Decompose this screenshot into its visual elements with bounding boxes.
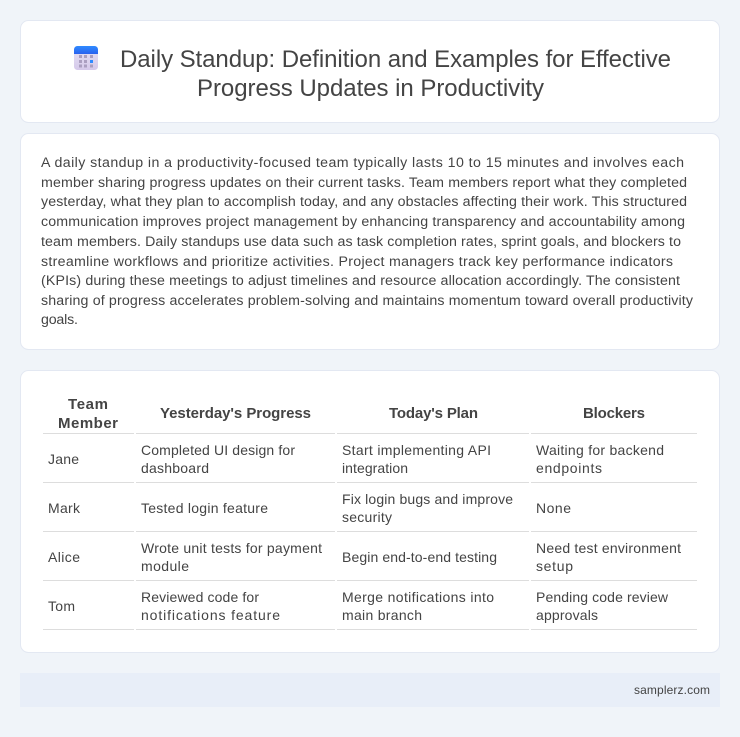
table row: Jane: Jane <box>48 451 79 467</box>
table row: Mark: Fix login bugs and improve <box>342 491 513 507</box>
title <box>120 46 671 102</box>
table header: Member <box>58 415 118 432</box>
description text: goals. <box>41 312 78 328</box>
table row: Jane: integration <box>342 460 408 476</box>
table row: Mark: Mark <box>48 500 81 516</box>
table row: Mark: None <box>536 500 571 516</box>
footer bar <box>20 673 720 707</box>
table row: Alice: Need test environment <box>536 540 681 556</box>
title: Daily Standup: Definition and Examples for Effective <box>120 46 671 73</box>
table row: Mark: security <box>342 509 392 525</box>
table row: Tom: approvals <box>536 607 598 623</box>
header panel <box>20 20 720 122</box>
table row: Alice: module <box>141 558 189 574</box>
table row: Alice: Wrote unit tests for payment <box>141 540 322 556</box>
panel: description <box>20 134 720 350</box>
description text: streamline workflows and prioritize activities. Project managers track key performance indicators <box>41 254 673 270</box>
title: Progress Updates in Productivity <box>197 75 544 102</box>
table header: Today's Plan <box>389 405 478 422</box>
table header <box>43 396 697 434</box>
table header: Team <box>68 396 108 413</box>
description text: A daily standup in a productivity-focused team typically lasts 10 to 15 minutes and involves each <box>41 155 684 171</box>
table row: Jane <box>43 442 697 483</box>
description text: (KPIs) during these meetings to adjust timelines and resource allocation accordingly. The consistent <box>41 273 680 289</box>
description text: yesterday, what they plan to accomplish today, and any obstacles affecting their work. This structured <box>41 194 687 210</box>
description text <box>41 155 694 328</box>
table row: Jane: Completed UI design for <box>141 442 295 458</box>
icon: calendar <box>74 46 98 70</box>
table row: Mark: Tested login feature <box>141 500 268 516</box>
table row: Jane: endpoints <box>536 460 602 476</box>
description text: sharing of progress accelerates problem-solving and maintains momentum toward overall productivity <box>41 293 694 309</box>
description text: team members. Daily standups use data such as task completion rates, sprint goals, and blockers to <box>41 234 681 250</box>
table row: Tom <box>43 589 697 630</box>
table header: Blockers <box>583 405 645 422</box>
panel: standup table <box>20 370 720 652</box>
table row: Alice: setup <box>536 558 573 574</box>
table row: Jane: Waiting for backend <box>536 442 664 458</box>
table row: Tom: Reviewed code for <box>141 589 259 605</box>
description text: member sharing progress updates on their current tasks. Team members report what they completed <box>41 175 687 191</box>
table row: Alice: Alice <box>48 549 80 565</box>
description text: communication improves project management by enhancing transparency and accountability among <box>41 214 685 230</box>
table row: Alice: Begin end-to-end testing <box>342 549 497 565</box>
table row: Tom: Pending code review <box>536 589 669 605</box>
footer text: samplerz.com: samplerz.com <box>634 683 710 697</box>
table row: Tom: Merge notifications into <box>342 589 494 605</box>
table header: Yesterday's Progress <box>160 405 311 422</box>
table row: Jane: Start implementing API <box>342 442 491 458</box>
table row: Tom: notifications feature <box>141 607 280 623</box>
table row: Tom: Tom <box>48 598 75 614</box>
table row: Jane: dashboard <box>141 460 209 476</box>
table row: Alice <box>43 540 697 581</box>
table row: Mark <box>43 491 697 532</box>
table row: Tom: main branch <box>342 607 422 623</box>
